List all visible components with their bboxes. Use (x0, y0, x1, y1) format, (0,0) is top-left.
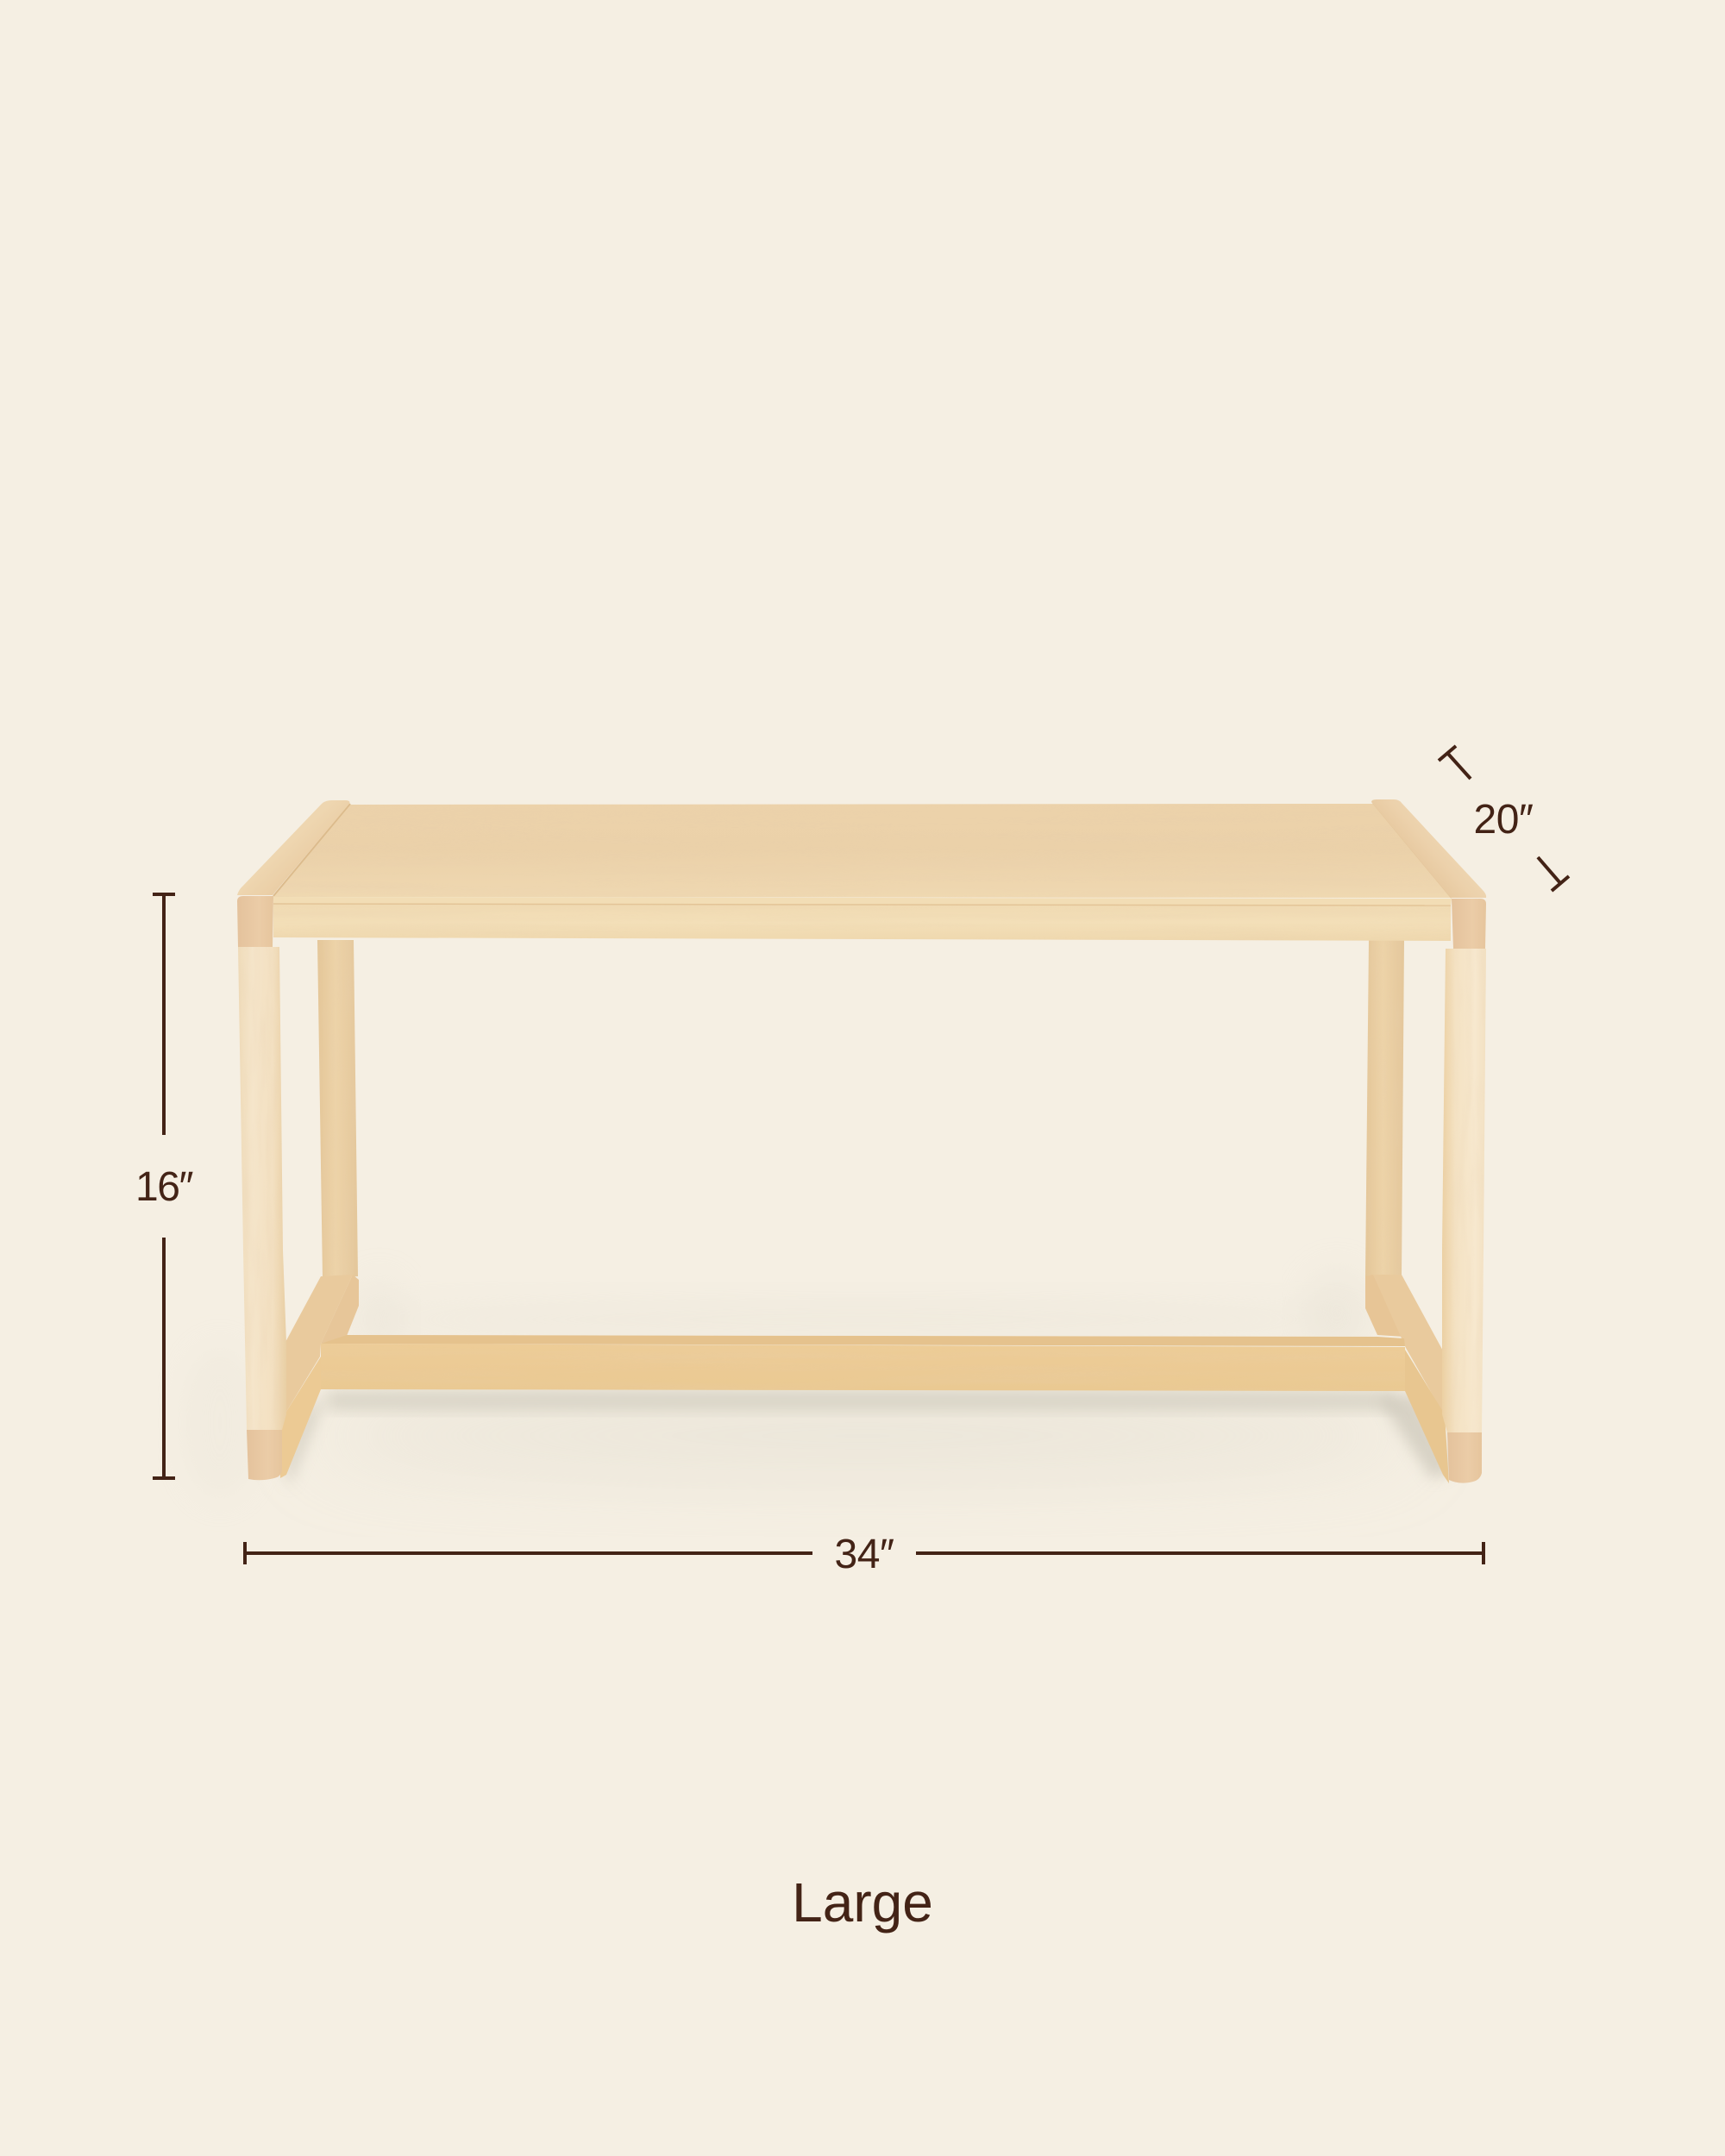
table (237, 799, 1486, 1483)
left top rail (237, 800, 349, 895)
back left leg (317, 940, 358, 1278)
right end cap (1452, 899, 1486, 949)
front left leg (238, 947, 286, 1430)
front apron (273, 897, 1452, 941)
floor shadows (181, 1268, 1453, 1501)
crossbar (321, 1335, 1405, 1391)
dimension: depth 20 (1439, 746, 1569, 891)
right top rail (1371, 799, 1486, 898)
dimension: width 34: 34″ (835, 1532, 894, 1577)
left end cap (237, 896, 273, 947)
dimension: width 34 (245, 1532, 1484, 1577)
dimension: height 16 (135, 894, 193, 1479)
dimension: depth 20: 20″ (1474, 797, 1534, 843)
tabletop surface (273, 803, 1452, 898)
back right leg (1365, 940, 1404, 1278)
front right leg (1442, 949, 1486, 1432)
right foot rail (1365, 1275, 1449, 1483)
size label: Large (792, 1871, 933, 1934)
dimension: height 16: 16″ (135, 1164, 193, 1210)
front right foot cap (1447, 1432, 1482, 1483)
front left foot cap (247, 1430, 282, 1480)
left foot rail (280, 1275, 359, 1478)
